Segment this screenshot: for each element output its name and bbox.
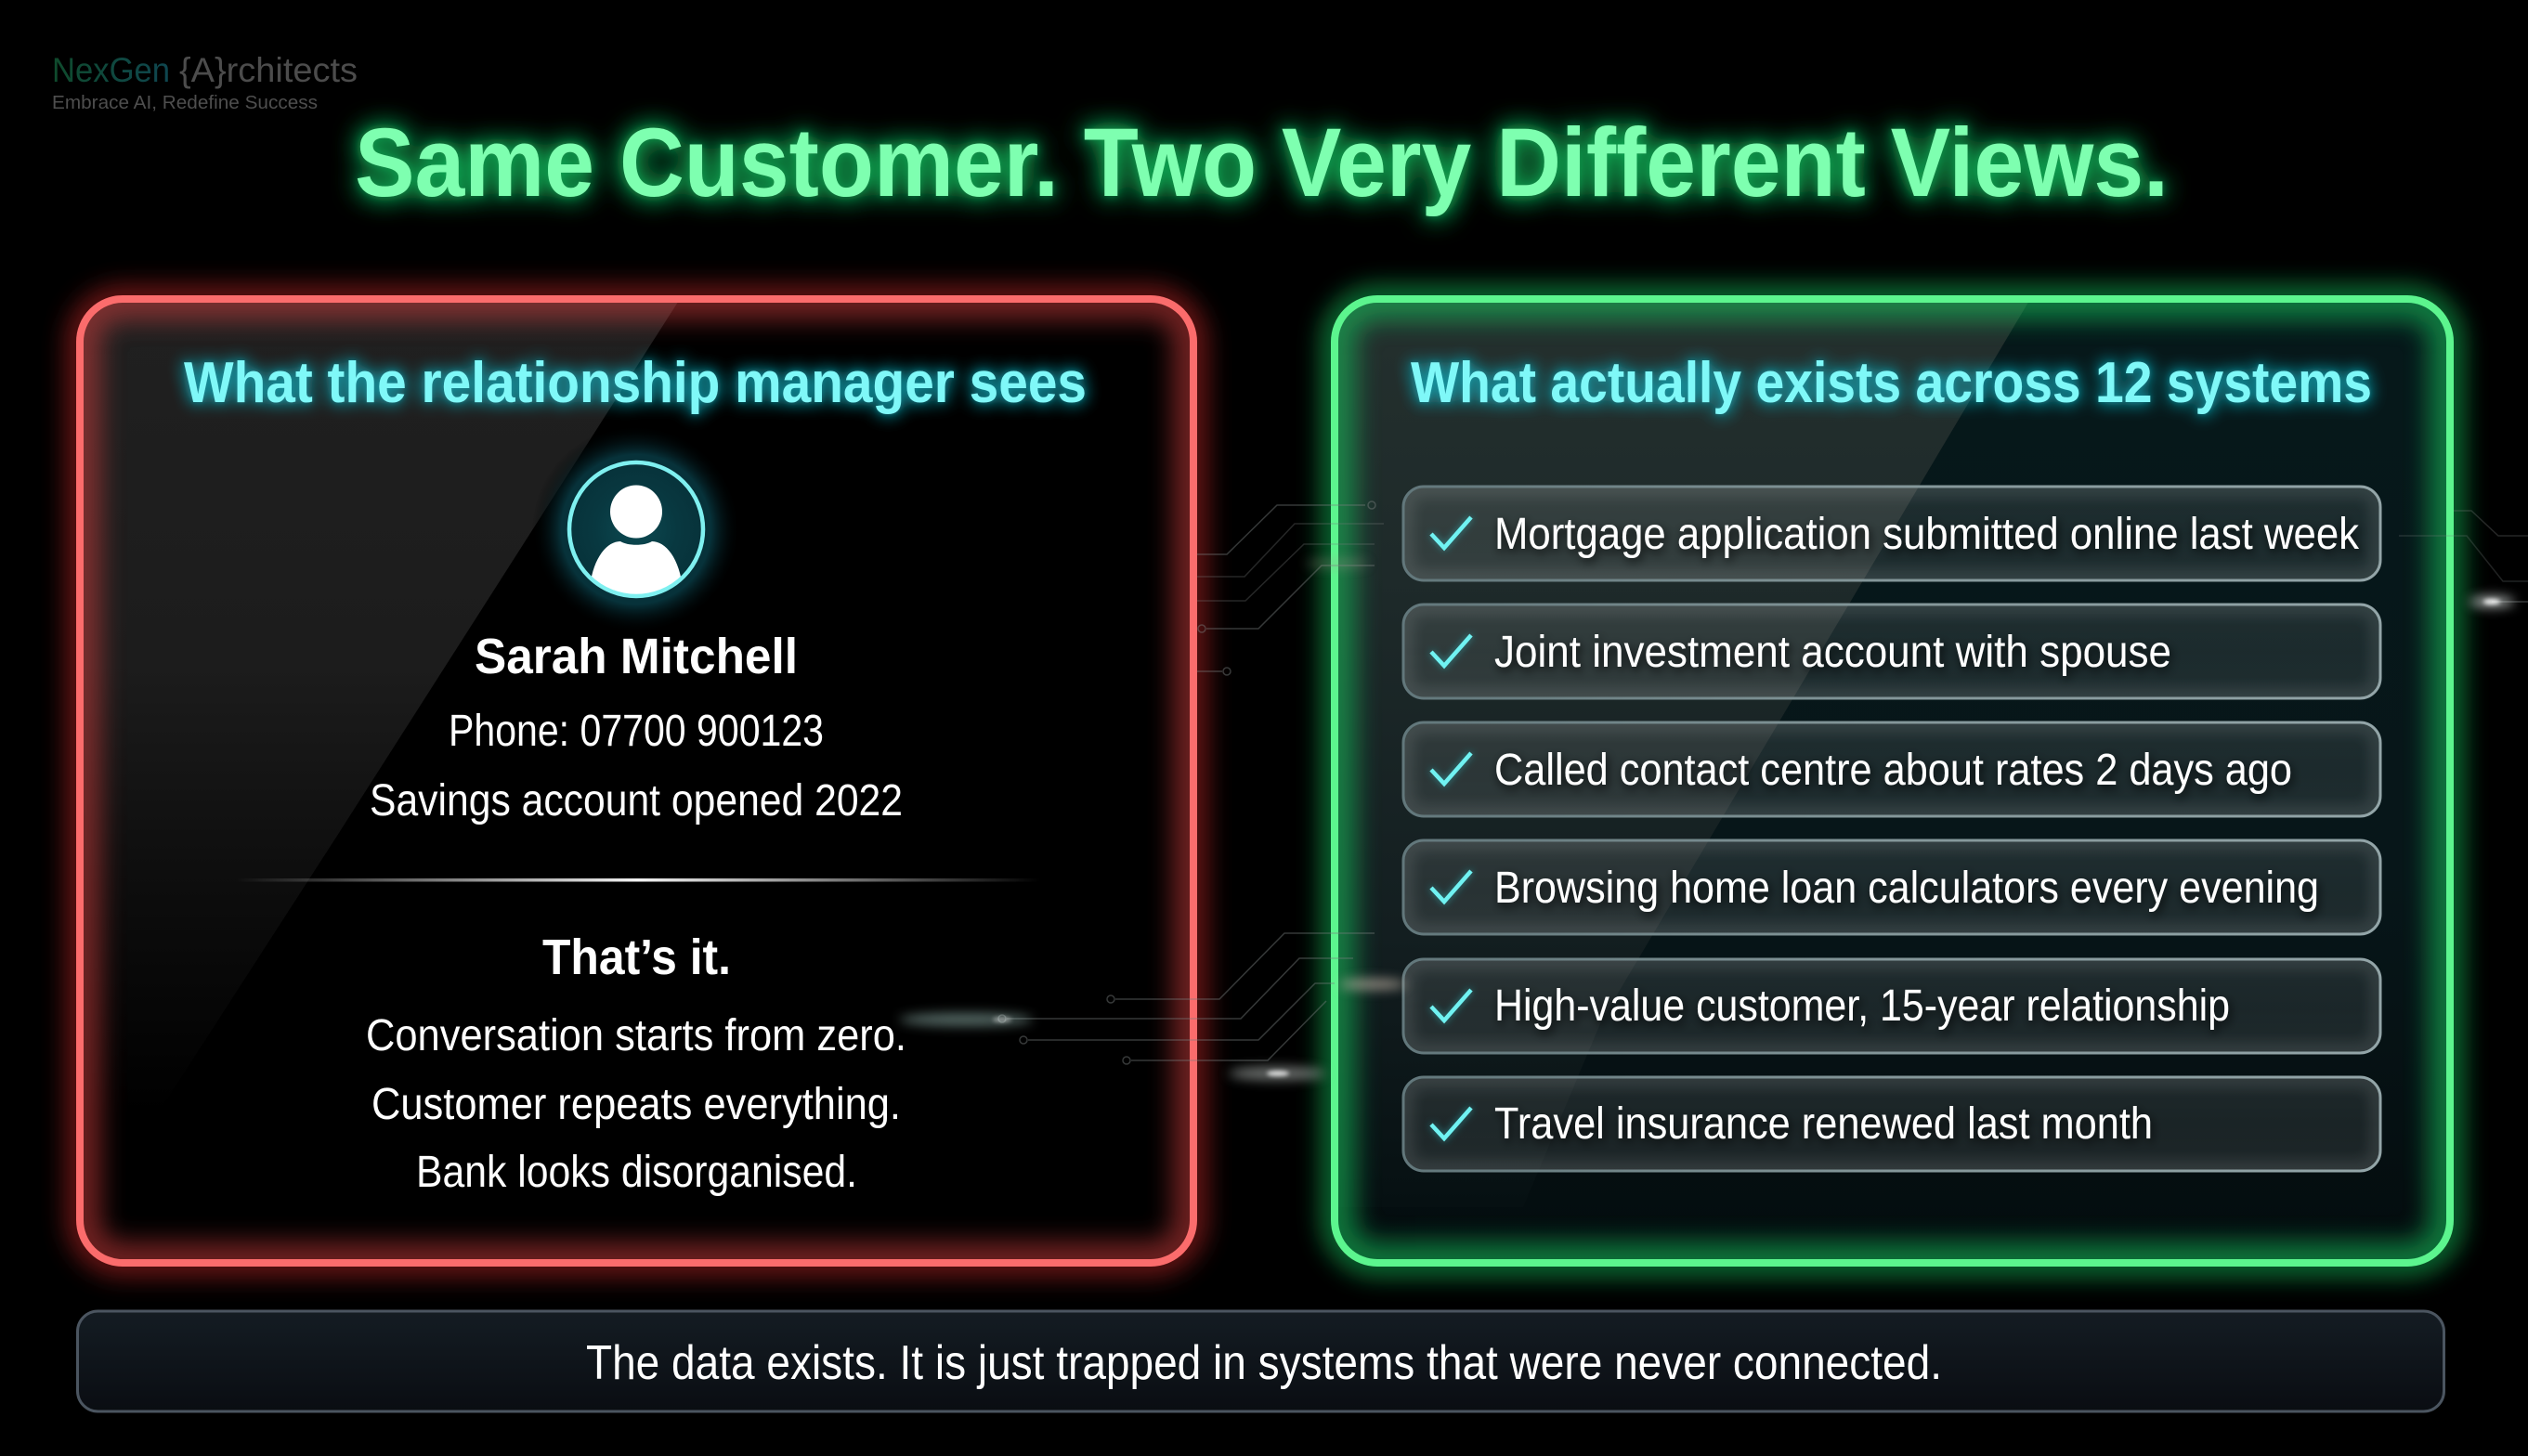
list row: contact centre [1403, 722, 2380, 816]
list row: high-value customer [1403, 959, 2380, 1053]
logo: {A}rchitects [179, 51, 358, 89]
customer name: Sarah Mitchell [475, 629, 798, 684]
panel: what actually exists across 12 systems [1335, 299, 2450, 1263]
that's it heading: That’s it. [542, 930, 731, 985]
list row: high-value customer: High-value customer, 15-year relationship [1494, 982, 2230, 1031]
list row: mortgage application [1403, 487, 2380, 580]
divider [235, 878, 1040, 882]
phone number: Phone: 07700 900123 [449, 707, 824, 756]
footer callout: The data exists. It is just trapped in systems that were never connected. [586, 1336, 1942, 1390]
list row: travel insurance: Travel insurance renewed last month [1494, 1099, 2153, 1149]
list row: home loan calculators: Browsing home loan calculators every evening [1494, 864, 2319, 913]
list row: travel insurance [1403, 1077, 2380, 1171]
savings account line: Savings account opened 2022 [370, 776, 903, 826]
icon: check [1431, 990, 1471, 1020]
consequences text [366, 1011, 906, 1197]
consequences text: Conversation starts from zero. [366, 1011, 906, 1060]
panel border: red [80, 299, 1193, 1263]
consequences text: Customer repeats everything. [371, 1080, 901, 1129]
list row: joint investment: Joint investment account with spouse [1494, 628, 2171, 677]
icon: customer avatar [542, 436, 729, 622]
footer callout [78, 1311, 2444, 1411]
circuit light flares [899, 560, 2514, 1080]
logo [52, 51, 358, 113]
icon: check [1431, 871, 1471, 902]
icon: check [1431, 517, 1471, 548]
panel glow: green [1335, 299, 2450, 1263]
icon: check [1431, 635, 1471, 666]
panel border: green [1335, 299, 2450, 1263]
list row: home loan calculators [1403, 840, 2380, 934]
list row: joint investment [1403, 604, 2380, 698]
icon: check [1431, 1108, 1471, 1138]
panel: what the relationship manager sees [80, 299, 1193, 1263]
circuit traces between panels [998, 501, 2528, 1064]
list row: mortgage application: Mortgage application submitted online last week [1494, 510, 2360, 559]
list row: contact centre: Called contact centre about rates 2 days ago [1494, 746, 2292, 795]
logo: Embrace AI, Redefine Success [52, 93, 318, 113]
heading: left: What the relationship manager sees [184, 351, 1087, 415]
panel fill: right [1335, 299, 2450, 1263]
icon: check [1431, 753, 1471, 784]
panel fill: left [80, 299, 1193, 1263]
logo: NexGen [52, 51, 170, 89]
title: Same Customer. Two Very Different Views. [355, 109, 2169, 217]
consequences text: Bank looks disorganised. [416, 1148, 857, 1197]
panel glow: red [80, 299, 1193, 1263]
heading: right: What actually exists across 12 systems [1411, 351, 2372, 415]
